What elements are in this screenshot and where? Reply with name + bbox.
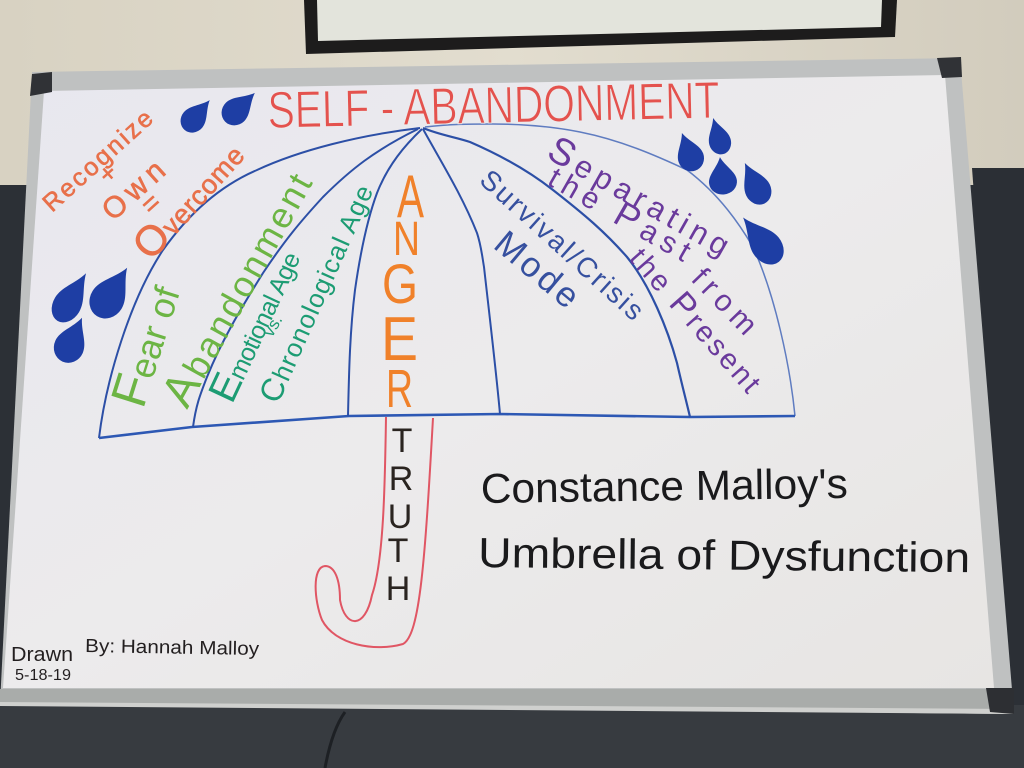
title: Constance Malloy's Umbrella of Dysfunction: Umbrella of Dysfunction	[478, 529, 970, 581]
panel text: emotional age vs chronological age: Chronological Age	[252, 179, 380, 408]
panel text: separating the past from the present: the Past	[542, 155, 700, 270]
title: Constance Malloy's Umbrella of Dysfunction: Constance Malloy's	[480, 460, 848, 512]
icons: rain drops	[45, 83, 791, 368]
handle text: truth: R	[389, 460, 413, 498]
text: recognize own overcome	[37, 104, 253, 268]
handle text: truth	[386, 422, 413, 608]
handle text: truth: T	[388, 532, 408, 570]
credit: drawn by: By: Hannah Malloy	[85, 636, 260, 660]
panel text: survival/crisis mode: Mode	[487, 223, 587, 316]
text: recognize own overcome: Own	[96, 154, 172, 227]
picture frame	[304, 0, 897, 54]
panel text: anger	[381, 163, 424, 419]
panel text: anger: A	[397, 163, 424, 230]
panel text: anger: E	[381, 305, 418, 374]
umbrella canopy	[99, 124, 795, 438]
text: recognize own overcome: Recognize	[37, 104, 159, 217]
title: Constance Malloy's Umbrella of Dysfunction	[478, 460, 970, 581]
handle text: truth: U	[388, 498, 412, 536]
handle text: truth: H	[386, 570, 410, 608]
credit: drawn by: Drawn	[11, 644, 73, 666]
panel text: separating the past from the present: from	[685, 262, 764, 342]
credit: drawn by	[11, 636, 260, 684]
panel text: anger: G	[382, 252, 418, 315]
panel text: separating the past from the present	[541, 128, 770, 400]
panel text: fear of abandonment: Fear of	[100, 277, 191, 413]
panel text: separating the past from the present: Separating	[541, 128, 738, 265]
sofa	[0, 168, 1024, 768]
credit: drawn by: 5-18-19	[15, 667, 71, 684]
umbrella handle	[316, 417, 433, 647]
wall	[0, 0, 1024, 190]
panel text: emotional age vs chronological age: vs.	[259, 312, 286, 340]
panel text: anger: N	[393, 213, 420, 266]
panel text: fear of abandonment: Abandonment	[150, 162, 322, 415]
text: recognize own overcome: =	[134, 186, 167, 220]
text: recognize own overcome: Overcome	[123, 131, 253, 268]
text: recognize own overcome: +	[92, 157, 123, 189]
panel text: survival/crisis mode: Survival/Crisis	[474, 163, 650, 326]
panel text: separating the past from the present: the Present	[622, 239, 770, 400]
panel text: anger: R	[386, 359, 413, 419]
heading: self-abandonment: SELF - ABANDONMENT	[267, 72, 720, 140]
panel text: emotional age vs chronological age: Emotional Age	[200, 242, 309, 409]
handle text: truth: T	[392, 422, 412, 460]
